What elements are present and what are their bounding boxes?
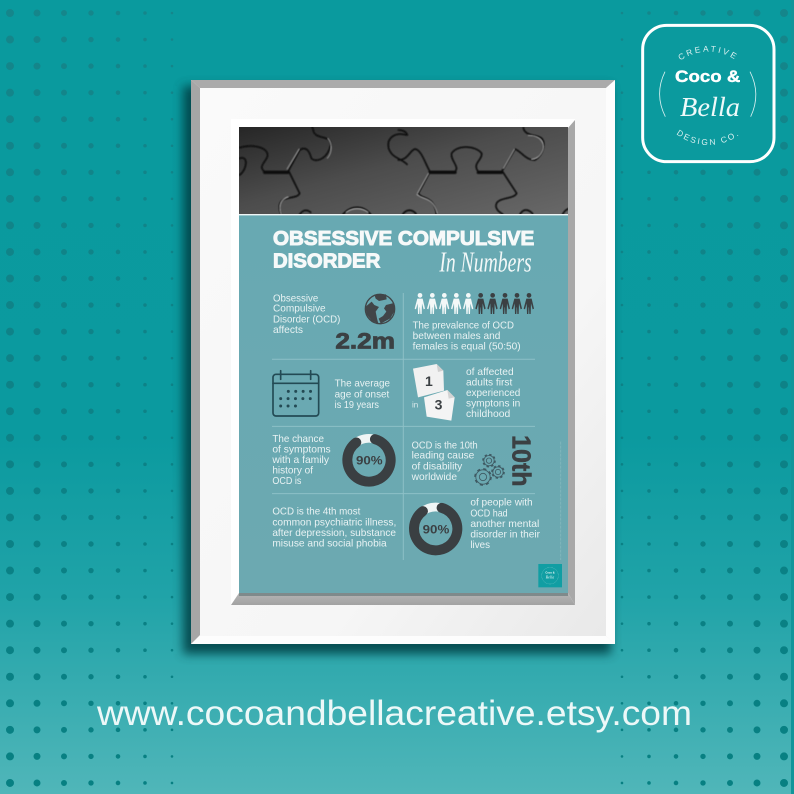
text: another mental disorder: disorder in their [470,530,541,541]
text: affected adults: of affected [466,367,514,378]
icon: 1 in 3 notes [412,364,455,421]
lower poster content [271,364,562,587]
icon: globe [365,294,395,324]
icon: ten people [415,293,534,314]
text: 4th most common [272,507,396,550]
text: affected adults: adults first [466,378,513,389]
text: 10th leading cause: leading cause [412,451,474,462]
text: family history: history of [272,466,313,477]
picture frame [191,80,615,644]
text: prevalence: The prevalence of OCD [413,320,514,331]
text: 4th most common: after depression, substance [272,528,396,539]
icon: 1 in 3 notes: 3 [435,396,443,412]
text: family history [271,434,331,487]
text: 10th leading cause: worldwide [411,472,457,483]
donut chart: 90% family history [347,438,391,482]
small logo: Bella [546,574,554,579]
text: 4th most common: misuse and social phobia [272,539,387,550]
text: family history: with a family [271,455,329,466]
subtitle: In Numbers: In Numbers [439,247,532,278]
text: family history: of symptoms [272,444,331,455]
title [273,228,534,272]
title: OBSESSIVE COMPULSIVE [273,228,534,250]
text: prevalence: females is equal (50:50) [413,342,521,353]
text: OCD affects: Compulsive [273,304,326,315]
poster background [239,214,568,593]
text: another mental disorder: lives [470,540,490,551]
logo: Coco & Bella: Coco & [675,67,740,86]
text: affected adults [466,367,520,420]
text: 4th most common: common psychiatric illness, [272,517,396,528]
text: family history: OCD is [272,476,301,487]
text: family history: The chance [272,434,324,445]
text: affected adults: experienced [466,388,520,399]
icon: 1 in 3 notes: in [412,400,418,409]
text: average age: The average [335,379,390,390]
small logo: Coco & [545,571,555,575]
website url: www.cocoandbellacreative.etsy.com [96,694,692,733]
text: another mental disorder: OCD had [470,508,508,519]
dot pattern: right [622,13,784,794]
stat: 10th rotated: 10th [507,435,537,487]
text: average age [335,379,390,411]
text: 10th leading cause [411,440,478,483]
text: OCD affects: Disorder (OCD) [273,314,340,325]
icon: 1 in 3 notes: 1 [425,373,433,389]
logo: Coco & Bella: DESIGN CO. [676,130,738,145]
text: OCD affects: affects [273,325,303,336]
donut chart: 90% another disorder: 90% [423,522,449,536]
text: 4th most common: OCD is the 4th most [272,507,361,518]
text: another mental disorder: another mental [470,519,539,530]
icon: calendar [273,371,319,416]
text: affected adults: symptons in [466,399,520,410]
title: DISORDER [273,250,381,272]
text: prevalence: between males and [413,331,500,342]
text: average age: is 19 years [335,400,379,411]
text: 10th leading cause: of disability [412,461,462,472]
text: another mental disorder [470,498,541,551]
logo: Coco & Bella: CREATIVE [678,46,737,60]
stat: 2.2m: 2.2m [335,329,395,354]
text: OCD affects [273,293,340,336]
text: OCD affects: Obsessive [273,293,318,304]
text: affected adults: childhood [466,409,510,420]
photo: puzzle pieces [239,127,569,216]
frame shadow [183,86,611,654]
text: 10th leading cause: OCD is the 10th [412,440,478,451]
icon: gears [475,455,504,485]
logo: Coco & Bella: Bella [680,92,740,122]
upper poster content [273,228,534,354]
dot pattern: left [10,13,172,794]
donut chart: 90% another disorder [414,507,457,550]
small logo [538,564,562,587]
text: prevalence [413,320,521,353]
donut chart: 90% family history: 90% [356,454,383,468]
text: average age: age of onset [335,389,390,400]
text: another mental disorder: of people with [470,498,533,509]
logo: Coco & Bella [641,24,776,164]
